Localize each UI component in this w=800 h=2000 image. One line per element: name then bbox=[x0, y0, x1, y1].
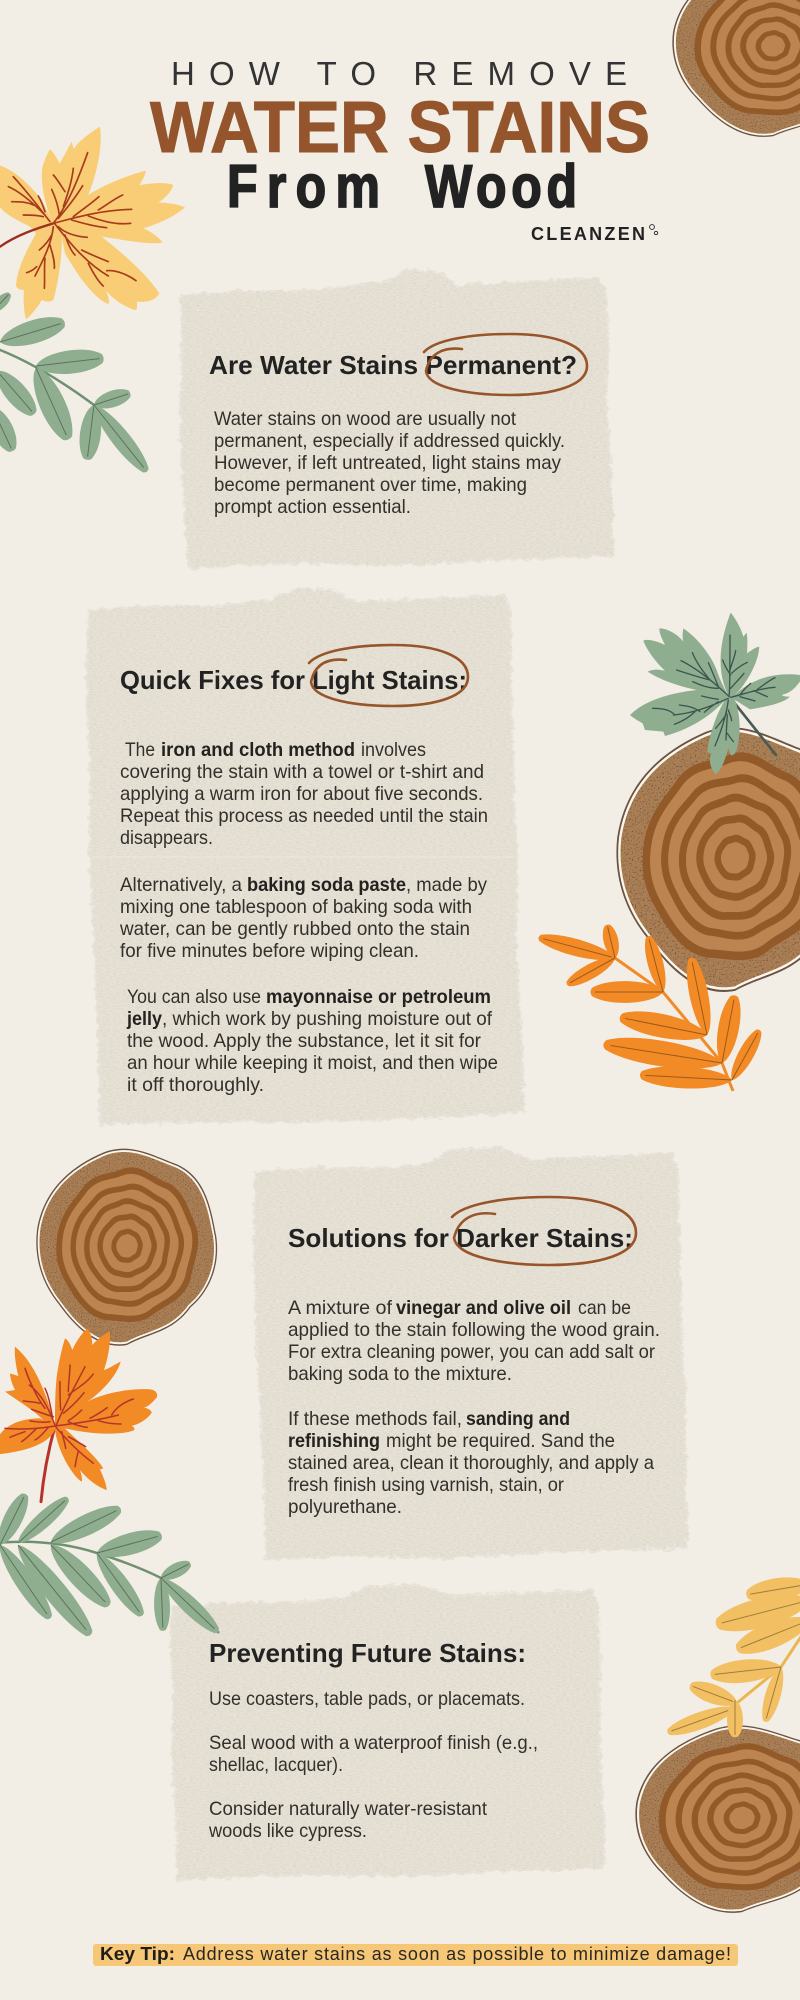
key tip message: Address water stains as soon as possible to minimize damage! bbox=[183, 1944, 731, 1964]
icon: yellow maple leaf bbox=[0, 127, 185, 319]
body text: prompt action essential. bbox=[214, 496, 411, 518]
tip: water-resistant woods bbox=[208, 1798, 488, 1842]
paragraph: sanding and refinishing: might be required. Sand the bbox=[386, 1430, 615, 1452]
torn paper sheet bbox=[254, 1148, 688, 1560]
icon: wood slice top right bbox=[672, 0, 800, 137]
paragraph: vinegar and olive oil: vinegar and olive oil bbox=[396, 1297, 571, 1319]
paragraph: iron and cloth method: covering the stain with a towel or t-shirt and bbox=[120, 761, 484, 783]
paragraph: sanding and refinishing: If these methods fail, bbox=[288, 1408, 462, 1430]
paragraph: baking soda paste: baking soda paste bbox=[247, 874, 406, 896]
paragraph: mayonnaise or petroleum jelly: jelly bbox=[126, 1008, 162, 1030]
paragraph: sanding and refinishing: fresh finish using varnish, stain, or bbox=[288, 1474, 564, 1496]
paragraph: vinegar and olive oil: For extra cleaning power, you can add salt or bbox=[288, 1341, 655, 1363]
paragraph: sanding and refinishing: refinishing bbox=[288, 1430, 380, 1452]
hand-drawn circle bbox=[309, 645, 468, 706]
heading: Preventing Future Stains: bbox=[209, 1638, 526, 1668]
icon: green sprig top left bbox=[0, 290, 154, 477]
title: how to remove: HOW TO REMOVE bbox=[171, 55, 627, 92]
paper fold line bbox=[92, 856, 516, 858]
icon: wood slice right bbox=[616, 727, 800, 992]
icon: orange sprig bbox=[536, 923, 766, 1091]
icon: wood slice bottom right bbox=[635, 1725, 800, 1913]
paragraph: mayonnaise or petroleum jelly: You can also use bbox=[127, 986, 261, 1008]
title: water stains: WATER STAINS bbox=[150, 88, 650, 168]
heading: Quick Fixes for Light Stains: bbox=[120, 665, 467, 695]
paragraph: mayonnaise or petroleum jelly: it off thoroughly. bbox=[127, 1074, 264, 1096]
hand-drawn circle bbox=[452, 1197, 636, 1265]
body text bbox=[214, 408, 565, 518]
panel: preventing future stains bbox=[170, 1585, 604, 1880]
body text: However, if left untreated, light stains may bbox=[214, 452, 561, 474]
brand logo: cleanzen: CLEANZEN bbox=[531, 224, 645, 244]
panel: are water stains permanent bbox=[180, 269, 613, 568]
paragraph: iron and cloth method: The bbox=[125, 739, 155, 761]
body text: permanent, especially if addressed quickly. bbox=[214, 430, 565, 452]
paragraph: iron and cloth method: iron and cloth method bbox=[161, 739, 355, 761]
heading: Are Water Stains Permanent? bbox=[209, 350, 577, 380]
paragraph: sanding and refinishing bbox=[288, 1408, 654, 1518]
paragraph: sanding and refinishing: stained area, clean it thoroughly, and apply a bbox=[288, 1452, 654, 1474]
tip: waterproof finish: shellac, lacquer). bbox=[209, 1754, 343, 1776]
paragraph: sanding and refinishing: sanding and bbox=[466, 1408, 570, 1430]
tip: water-resistant woods: woods like cypress. bbox=[208, 1820, 367, 1842]
paragraph: baking soda paste: mixing one tablespoon of baking soda with bbox=[120, 896, 472, 918]
paragraph: vinegar and olive oil: A mixture of bbox=[288, 1297, 393, 1319]
icon: orange maple leaf bbox=[0, 1328, 157, 1502]
paragraph: iron and cloth method: involves bbox=[361, 739, 426, 761]
torn paper sheet bbox=[170, 1585, 604, 1880]
paragraph: baking soda paste: for five minutes before wiping clean. bbox=[120, 940, 419, 962]
banner background bbox=[93, 1944, 738, 1966]
paragraph: vinegar and olive oil: baking soda to the mixture. bbox=[288, 1363, 512, 1385]
icon: green sprig bottom left bbox=[0, 1490, 224, 1642]
paragraph: vinegar and olive oil: applied to the stain following the wood grain. bbox=[288, 1319, 660, 1341]
heading: Solutions for Darker Stains: bbox=[288, 1223, 633, 1253]
paragraph: mayonnaise or petroleum jelly: an hour while keeping it moist, and then wipe bbox=[127, 1052, 498, 1074]
paragraph: iron and cloth method: disappears. bbox=[120, 827, 213, 849]
paragraph: mayonnaise or petroleum jelly: , which work by pushing moisture out of bbox=[162, 1008, 493, 1030]
title: from wood: Wood bbox=[425, 153, 577, 220]
title: from wood: From bbox=[227, 153, 380, 220]
paragraph: baking soda paste: water, can be gently rubbed onto the stain bbox=[119, 918, 470, 940]
paragraph: baking soda paste: , made by bbox=[406, 874, 487, 896]
body text: become permanent over time, making bbox=[214, 474, 527, 496]
icon: wood slice left bbox=[36, 1149, 217, 1346]
key tip label: Key Tip: bbox=[100, 1944, 175, 1964]
panel: solutions for darker stains bbox=[254, 1148, 688, 1560]
tip: waterproof finish: Seal wood with a waterproof finish (e.g., bbox=[209, 1732, 538, 1754]
icon: green maple leaf bbox=[630, 613, 800, 774]
paragraph: sanding and refinishing: polyurethane. bbox=[288, 1496, 402, 1518]
paragraph: iron and cloth method: applying a warm iron for about five seconds. bbox=[120, 783, 483, 805]
paragraph: iron and cloth method bbox=[120, 739, 488, 849]
torn paper sheet bbox=[86, 588, 524, 1124]
paragraph: vinegar and olive oil: can be bbox=[578, 1297, 631, 1319]
paragraph: vinegar and olive oil bbox=[288, 1297, 660, 1385]
panel: quick fixes for light stains bbox=[86, 588, 524, 1124]
icon: yellow sprig bbox=[664, 1573, 800, 1740]
tip: waterproof finish bbox=[209, 1732, 538, 1776]
key tip banner bbox=[93, 1944, 738, 1966]
paragraph: mayonnaise or petroleum jelly bbox=[126, 986, 498, 1096]
tip: coasters: Use coasters, table pads, or placemats. bbox=[209, 1688, 525, 1710]
body text: Water stains on wood are usually not bbox=[214, 408, 517, 430]
paragraph: baking soda paste bbox=[119, 874, 487, 962]
hand-drawn circle bbox=[424, 334, 587, 395]
paragraph: baking soda paste: Alternatively, a bbox=[120, 874, 242, 896]
paragraph: mayonnaise or petroleum jelly: mayonnaise or petroleum bbox=[266, 986, 491, 1008]
torn paper sheet bbox=[180, 269, 613, 568]
paragraph: iron and cloth method: Repeat this process as needed until the stain bbox=[120, 805, 488, 827]
tip: water-resistant woods: Consider naturally water-resistant bbox=[209, 1798, 488, 1820]
paragraph: mayonnaise or petroleum jelly: the wood. Apply the substance, let it sit for bbox=[127, 1030, 481, 1052]
title: from wood bbox=[227, 153, 577, 220]
